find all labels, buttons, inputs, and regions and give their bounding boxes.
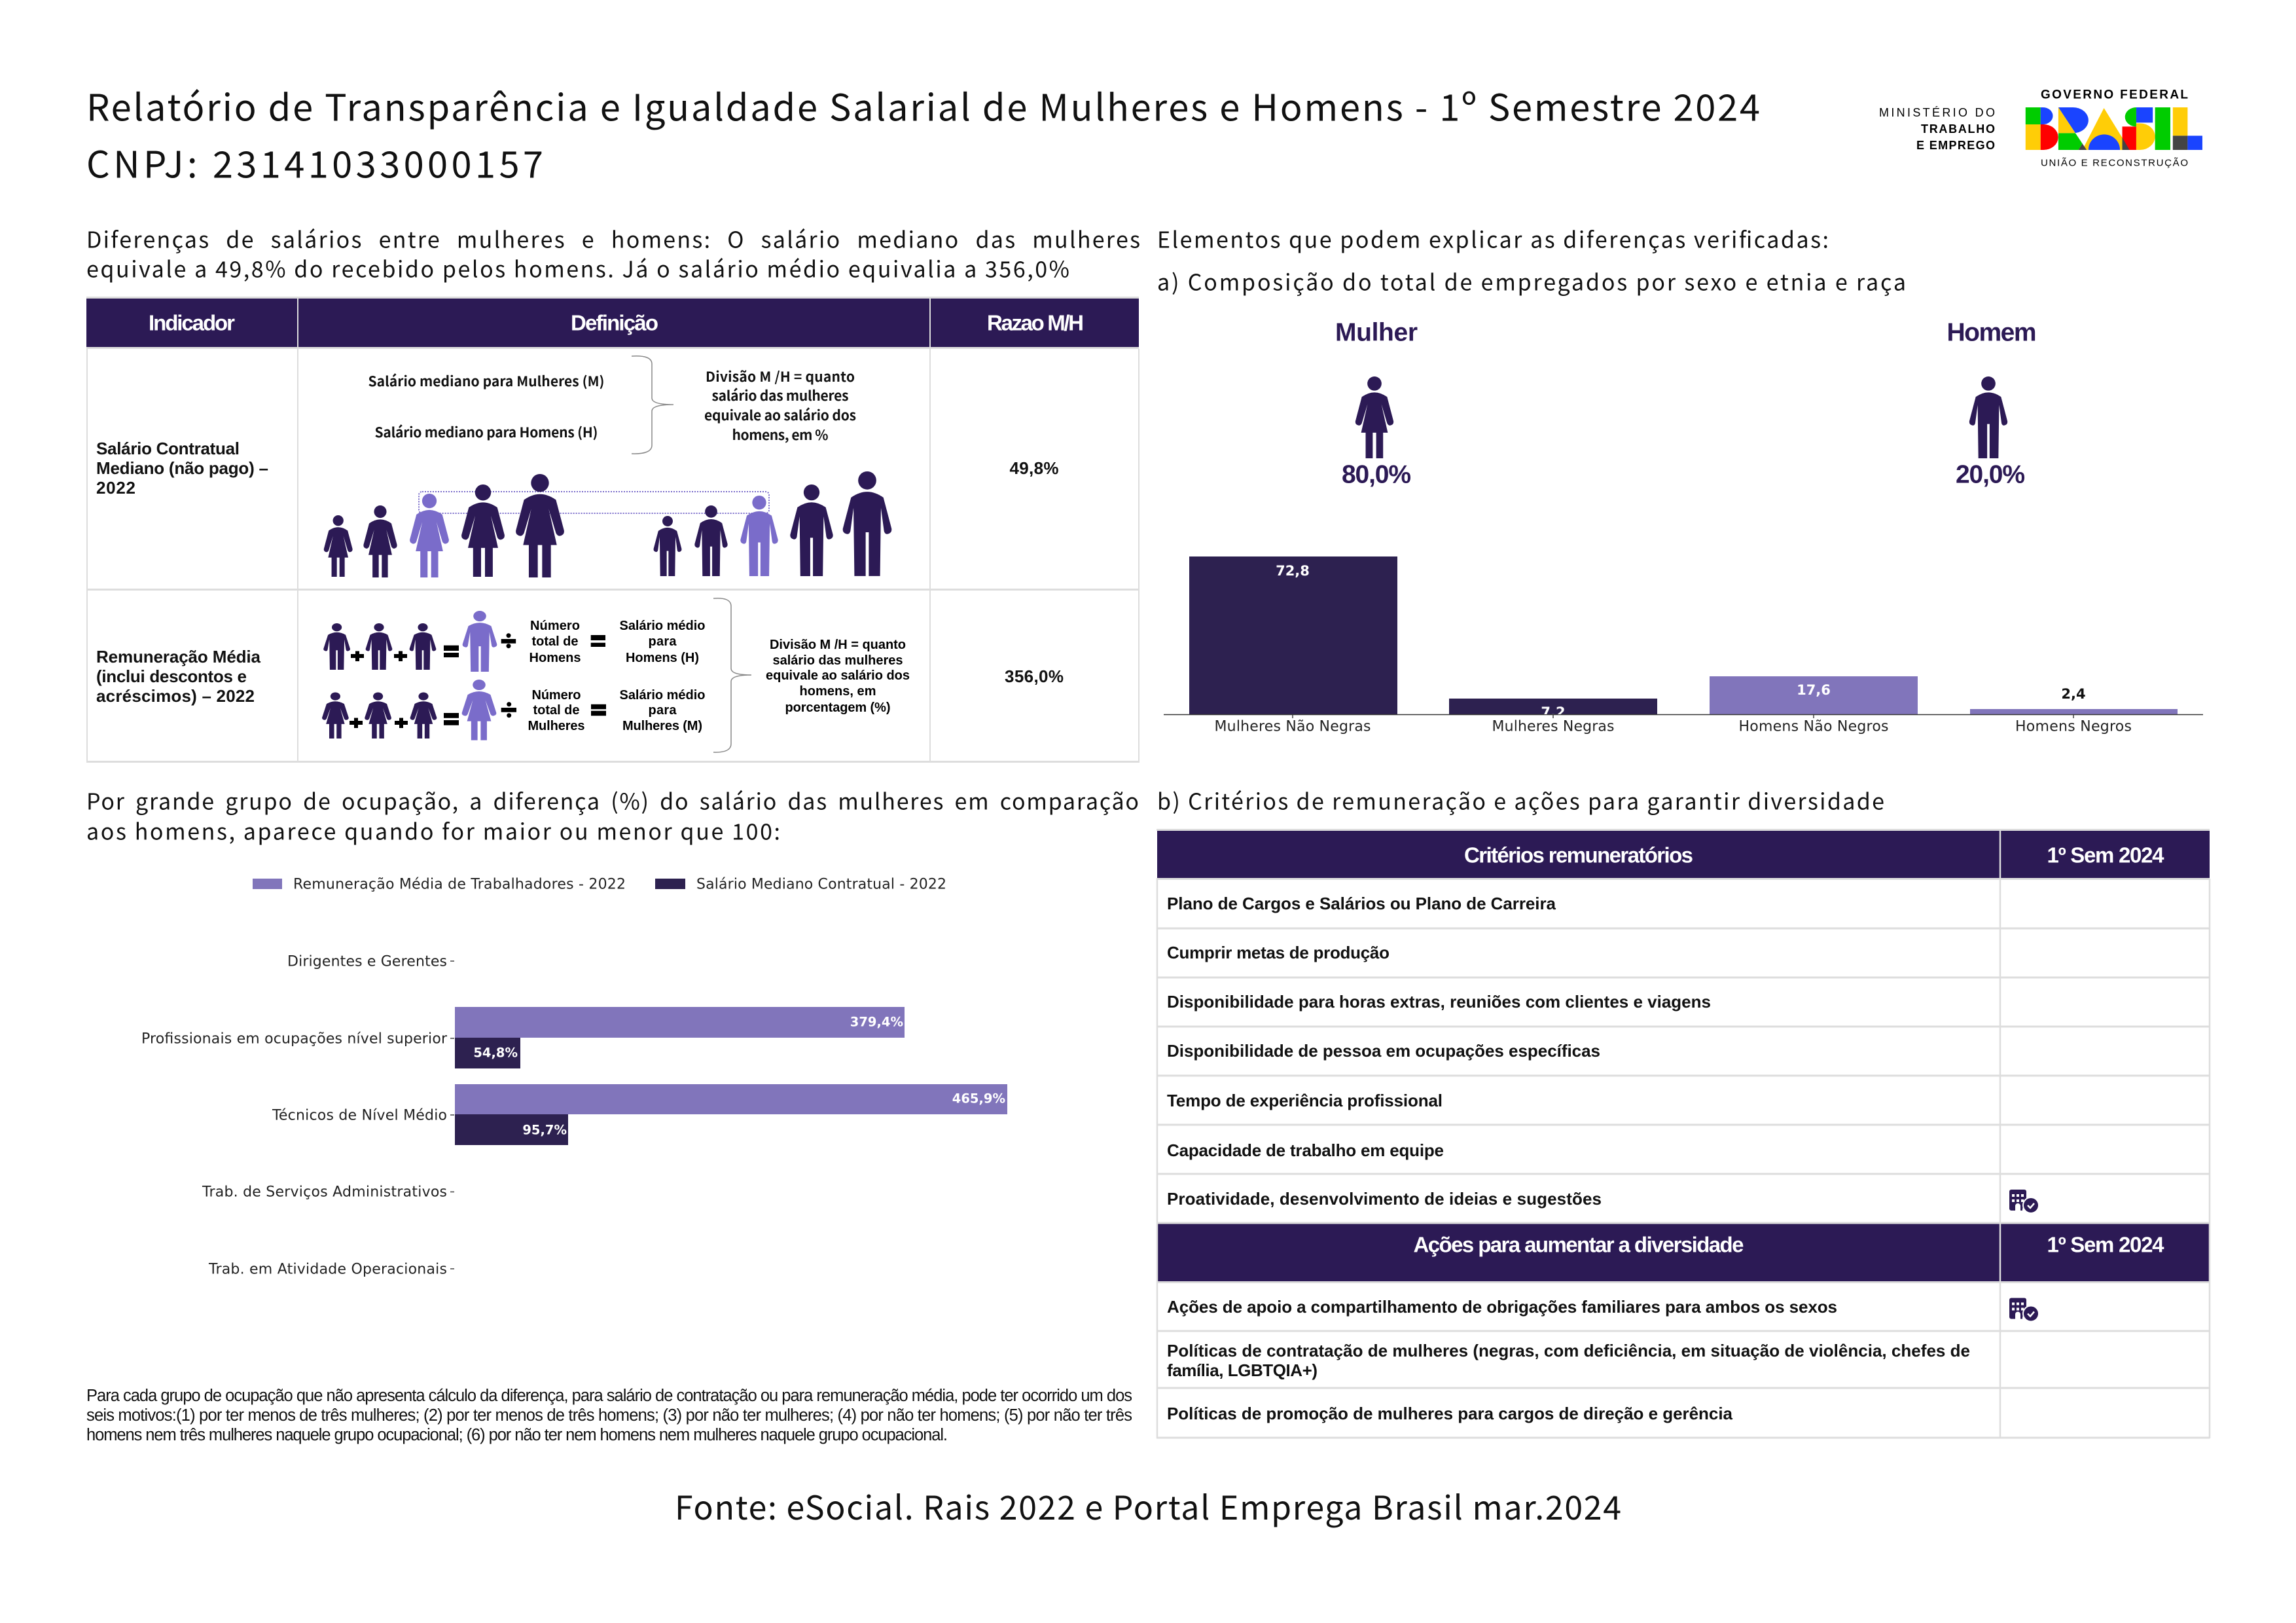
chave e divisão M/H: Divisão M /H = quanto bbox=[770, 638, 906, 652]
heading: grande grupo de ocupação: aos homens, aparece quando for maior ou menor que 100: bbox=[86, 814, 780, 846]
logo: ministério e governo federal: GOVERNO FEDERAL bbox=[2041, 88, 2188, 102]
logo: ministério e governo federal: MINISTÉRIO DO bbox=[1879, 106, 1995, 119]
row label: remuneração média bbox=[96, 647, 261, 706]
linhas de critérios: Plano de Cargos e Salários ou Plano de Carreira bbox=[1167, 894, 1556, 913]
row label: remuneração média: (inclui descontos e bbox=[96, 666, 247, 686]
axis labels: Dirigentes e Gerentes bbox=[287, 953, 447, 970]
heading: critérios de remuneração: b) Critérios de remuneração e ações para garantir diversidade bbox=[1157, 784, 1884, 816]
definição: salário mediano: salário das mulheres bbox=[712, 386, 848, 405]
row label: remuneração média: Remuneração Média bbox=[96, 647, 261, 666]
fórmula: homens: para bbox=[648, 634, 677, 649]
fórmula: mulheres: Mulheres bbox=[528, 719, 585, 733]
header: critérios: Critérios remuneratórios bbox=[1464, 843, 1693, 867]
header: critérios bbox=[1464, 843, 2164, 867]
text: diferenças de salários: equivale a 49,8% do recebido pelos homens. Já o salário médio equivalia a 356,0% bbox=[86, 251, 1069, 284]
chart: composição por sexo e raça: Homens Negros bbox=[2015, 719, 2132, 735]
fórmula: homens bbox=[323, 611, 706, 672]
bars: 54,8% bbox=[473, 1045, 518, 1061]
axis labels: Trab. em Atividade Operacionais bbox=[208, 1261, 447, 1278]
fórmula: homens: total de bbox=[531, 634, 579, 649]
footnote: homens nem três mulheres naquele grupo ocupacional; (6) por não ter nem homens nem mulheres naquele grupo ocupacional. bbox=[86, 1426, 948, 1444]
panel: mulher 80% bbox=[1335, 318, 1418, 488]
definição: salário mediano: homens, em % bbox=[732, 425, 829, 445]
heading: elementos que podem explicar: Elementos que podem explicar as diferenças verificadas: bbox=[1157, 223, 1829, 254]
linhas de critérios: Cumprir metas de produção bbox=[1167, 943, 1390, 962]
definição: salário mediano: Salário mediano para Mulheres (M) bbox=[368, 371, 605, 391]
row label: remuneração média: acréscimos) – 2022 bbox=[96, 686, 255, 706]
header: ações: Ações para aumentar a diversidade bbox=[1414, 1232, 1744, 1257]
heading: elementos que podem explicar: a) Composição do total de empregados por sexo e etnia e raça bbox=[1157, 264, 1906, 297]
panel: mulher 80%: 80,0% bbox=[1342, 461, 1411, 488]
value 49,8%: 49,8% bbox=[1009, 458, 1059, 478]
linhas de critérios: Proatividade, desenvolvimento de ideias e sugestões bbox=[1167, 1189, 1602, 1209]
row label: salário contratual: 2022 bbox=[96, 478, 135, 498]
chart: composição por sexo e raça bbox=[1164, 556, 2203, 735]
axis labels: Técnicos de Nível Médio bbox=[272, 1108, 447, 1123]
definição: salário mediano: Divisão M /H = quanto bbox=[706, 367, 855, 386]
linhas de critérios bbox=[1167, 894, 1711, 1209]
linhas de critérios: Tempo de experiência profissional bbox=[1167, 1091, 1443, 1110]
logo: ministério e governo federal: E EMPREGO bbox=[1916, 139, 1995, 152]
header: ações bbox=[1414, 1232, 2164, 1257]
chart: composição por sexo e raça: 7,2 bbox=[1541, 704, 1566, 720]
definição: salário mediano: Salário mediano para Homens (H) bbox=[374, 422, 598, 442]
text: diferenças de salários bbox=[86, 223, 1140, 284]
panel: mulher 80%: Mulher bbox=[1335, 318, 1418, 347]
linhas de ações: Políticas de contratação de mulheres (negras, com deficiência, em situação de violência, chefes de bbox=[1167, 1341, 1970, 1360]
linhas de ações bbox=[1167, 1297, 1970, 1423]
linhas de critérios: Disponibilidade de pessoa em ocupações específicas bbox=[1167, 1041, 1600, 1061]
chart: composição por sexo e raça: 17,6 bbox=[1797, 682, 1831, 698]
header: critérios: 1º Sem 2024 bbox=[2047, 843, 2164, 867]
panel: homem 20%: 20,0% bbox=[1956, 461, 2025, 488]
text: diferenças de salários: Diferenças de salários entre mulheres e homens: O salário mediano das mulheres bbox=[86, 223, 1140, 254]
chart: composição por sexo e raça: 2,4 bbox=[2061, 686, 2086, 702]
axis labels bbox=[141, 953, 454, 1278]
chave e divisão M/H: porcentagem (%) bbox=[785, 701, 890, 715]
heading: grande grupo de ocupação: Por grande grupo de ocupação, a diferença (%) do salário das mulheres em comparação bbox=[86, 784, 1139, 816]
panel: tabela indicador definição razão bbox=[86, 297, 1139, 763]
panel: homem 20% bbox=[1946, 318, 2037, 488]
heading: grande grupo de ocupação bbox=[86, 784, 1139, 846]
icon: empresa marcada ações de apoio bbox=[2009, 1298, 2039, 1321]
fórmula: mulheres: Salário médio bbox=[619, 688, 706, 702]
title bbox=[86, 79, 1760, 189]
legend: Remuneração Média de Trabalhadores - 2022 bbox=[293, 876, 626, 893]
chave e divisão M/H: salário das mulheres bbox=[772, 653, 903, 668]
chave e divisão M/H: equivale ao salário dos bbox=[766, 668, 910, 683]
panel: tabela critérios e ações bbox=[1157, 829, 2210, 1438]
linhas de ações: Ações de apoio a compartilhamento de obrigações familiares para ambos os sexos bbox=[1167, 1297, 1837, 1317]
definição: salário mediano bbox=[368, 356, 856, 454]
bars: 95,7% bbox=[522, 1122, 567, 1138]
linhas de ações: Políticas de promoção de mulheres para cargos de direção e gerência bbox=[1167, 1404, 1733, 1423]
fórmula: mulheres: Mulheres (M) bbox=[622, 719, 702, 733]
footnote: seis motivos:(1) por ter menos de três mulheres; (2) por ter menos de três homens; (3) por não ter mulheres; (4) por não ter homens; (5) por não ter três bbox=[86, 1406, 1132, 1425]
icon: empresa marcada proatividade bbox=[2009, 1190, 2039, 1213]
legend bbox=[253, 876, 946, 893]
chart: barras horizontais por ocupação bbox=[141, 876, 1007, 1278]
logo: ministério e governo federal bbox=[1879, 88, 2202, 169]
fonte: Fonte: eSocial. Rais 2022 e Portal Emprega Brasil mar.2024 bbox=[675, 1482, 1621, 1529]
footnote: Para cada grupo de ocupação que não apresenta cálculo da diferença, para salário de contratação ou para remuneração média, pode ter ocorrido um dos bbox=[86, 1387, 1132, 1405]
fórmula: homens: Salário médio bbox=[619, 619, 706, 633]
bars: 379,4% bbox=[850, 1015, 903, 1029]
fórmula: mulheres: para bbox=[648, 703, 677, 718]
linhas de critérios: Disponibilidade para horas extras, reuniões com clientes e viagens bbox=[1167, 992, 1711, 1012]
fórmula: mulheres: Número bbox=[531, 688, 581, 702]
fórmula: homens: Número bbox=[530, 619, 580, 633]
linhas de ações: família, LGBTQIA+) bbox=[1167, 1360, 1318, 1380]
chave e divisão M/H bbox=[713, 598, 910, 752]
linhas de critérios: Capacidade de trabalho em equipe bbox=[1167, 1140, 1444, 1160]
table header: Indicador bbox=[149, 310, 235, 335]
legend: Salário Mediano Contratual - 2022 bbox=[696, 876, 946, 893]
row label: salário contratual: Salário Contratual bbox=[96, 439, 240, 458]
fórmula: mulheres bbox=[322, 680, 706, 740]
logo: ministério e governo federal: UNIÃO E RECONSTRUÇÃO bbox=[2041, 157, 2188, 169]
icons: pessoas mulheres e homens bbox=[324, 471, 891, 577]
bars: 465,9% bbox=[952, 1091, 1005, 1106]
title: Relatório de Transparência e Igualdade Salarial de Mulheres e Homens - 1º Semestre 2024 bbox=[86, 79, 1760, 132]
row label: salário contratual bbox=[96, 439, 268, 498]
heading: elementos que podem explicar bbox=[1157, 223, 1906, 297]
axis labels: Profissionais em ocupações nível superior bbox=[141, 1030, 448, 1048]
table header: Razao M/H bbox=[987, 310, 1084, 335]
chart: composição por sexo e raça: Mulheres Negras bbox=[1492, 719, 1614, 735]
header: ações: 1º Sem 2024 bbox=[2047, 1232, 2164, 1257]
value 356,0%: 356,0% bbox=[1005, 666, 1064, 686]
chart: composição por sexo e raça: Homens Não Negros bbox=[1738, 719, 1889, 735]
definição: salário mediano: equivale ao salário dos bbox=[704, 405, 856, 425]
axis labels: Trab. de Serviços Administrativos bbox=[202, 1184, 447, 1201]
chart: composição por sexo e raça: Mulheres Não Negras bbox=[1215, 719, 1371, 735]
chave e divisão M/H: homens, em bbox=[800, 684, 876, 699]
panel: homem 20%: Homem bbox=[1946, 318, 2037, 347]
row label: salário contratual: Mediano (não pago) – bbox=[96, 458, 268, 478]
table header bbox=[149, 310, 1084, 335]
chart: composição por sexo e raça: 72,8 bbox=[1276, 563, 1310, 579]
bars bbox=[455, 1007, 1007, 1145]
logo: ministério e governo federal: TRABALHO bbox=[1921, 122, 1995, 136]
footnote bbox=[86, 1387, 1132, 1444]
table header: Definição bbox=[571, 310, 658, 335]
title: CNPJ: 23141033000157 bbox=[86, 136, 543, 189]
fórmula: homens: Homens (H) bbox=[626, 651, 699, 665]
fórmula: homens: Homens bbox=[529, 651, 581, 665]
fórmula: mulheres: total de bbox=[533, 703, 580, 718]
